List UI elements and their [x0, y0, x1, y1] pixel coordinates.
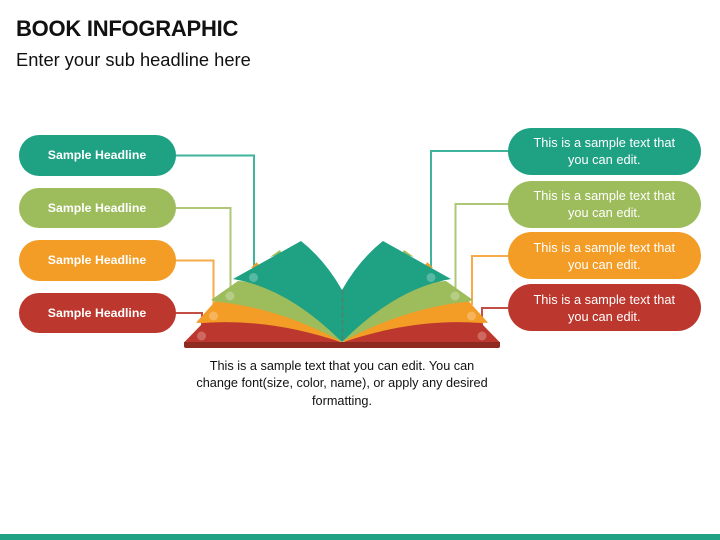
right pill: red text: This is a sample text that — [533, 292, 675, 306]
teal pages — [233, 241, 451, 342]
caption text — [196, 359, 488, 408]
left pill: teal headline — [18, 135, 176, 176]
book base — [184, 342, 500, 348]
right pill: teal text: This is a sample text that — [533, 135, 675, 150]
left pill: green headline — [18, 188, 176, 228]
right pill: green text — [508, 180, 701, 228]
left pill: teal headline: Sample Headline — [48, 148, 146, 162]
right pill: red text — [508, 284, 701, 331]
subtitle: Enter your sub headline here — [16, 48, 251, 70]
left pill: green headline: Sample Headline — [48, 200, 146, 214]
caption text: This is a sample text that you can edit. You can — [210, 359, 474, 373]
right pill: teal text — [508, 128, 701, 174]
red pages — [184, 322, 500, 342]
page marker dots — [197, 273, 486, 340]
caption text: change font(size, color, name), or apply any desired — [196, 376, 488, 390]
right pill: green text: you can edit. — [568, 205, 641, 220]
left pill: orange headline — [18, 240, 176, 280]
right pill: orange text: This is a sample text that — [533, 240, 675, 254]
orange pages — [196, 302, 488, 342]
hidden page edges behind teal pages — [251, 250, 433, 268]
book spine fold — [342, 290, 344, 342]
right pill: green text: This is a sample text that — [533, 188, 675, 203]
right pill: teal text: you can edit. — [568, 152, 641, 167]
title: BOOK INFOGRAPHIC — [16, 16, 238, 41]
caption text: formatting. — [312, 394, 372, 408]
green pages — [211, 281, 473, 342]
right pill: red text: you can edit. — [568, 308, 641, 324]
right pill: orange text — [508, 232, 701, 279]
left pill: red headline — [18, 292, 176, 333]
bottom bar — [0, 534, 720, 540]
left pill: orange headline: Sample Headline — [48, 253, 146, 267]
left pill: red headline: Sample Headline — [48, 306, 146, 320]
right pill: orange text: you can edit. — [568, 256, 641, 272]
